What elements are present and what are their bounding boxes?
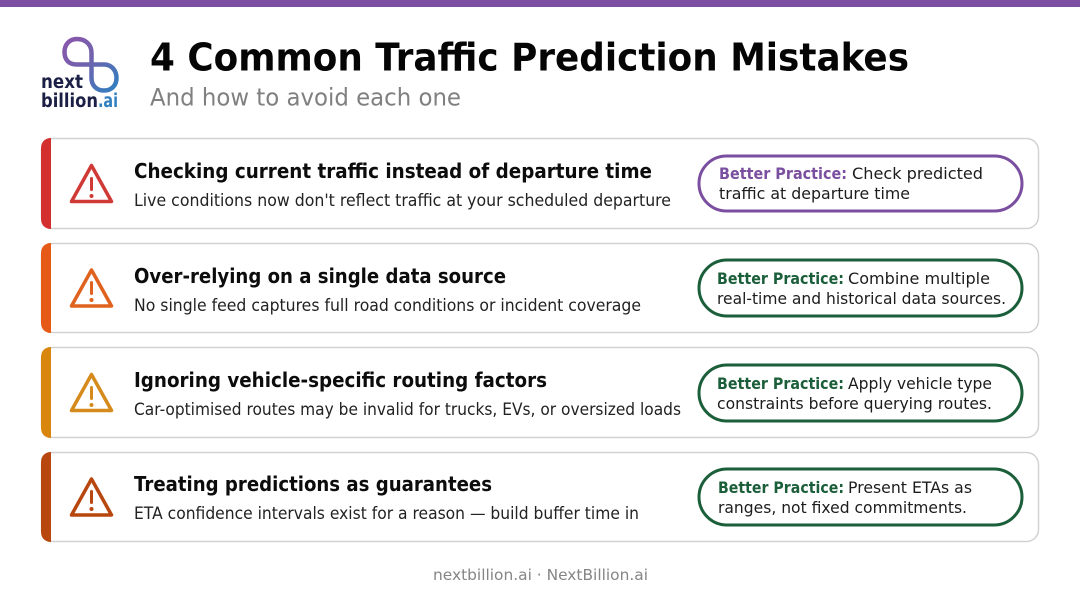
better practice pill: Apply vehicle type	[848, 374, 992, 393]
better practice pill	[699, 260, 1022, 316]
better practice pill: Better Practice:	[718, 478, 844, 497]
rust accent bar	[41, 452, 51, 542]
better practice pill: traffic at departure time	[719, 184, 910, 203]
mistake heading: Over-relying on a single data source	[134, 264, 506, 288]
better practice pill: Better Practice:	[719, 164, 847, 183]
panel: mistake 2	[41, 243, 1038, 333]
better practice pill: Better Practice:	[717, 269, 844, 288]
title: 4 Common Traffic Prediction Mistakes	[150, 36, 909, 80]
better practice pill	[699, 156, 1022, 211]
mistake description: Live conditions now don't reflect traffic at your scheduled departure	[134, 191, 671, 210]
orange accent bar	[41, 243, 51, 333]
amber accent bar	[41, 347, 51, 438]
red accent bar	[41, 138, 51, 229]
better practice pill: real-time and historical data sources.	[717, 289, 1006, 308]
better practice pill: Better Practice:	[717, 374, 844, 393]
panel: mistake 1	[41, 138, 1038, 229]
panel: mistake 4	[41, 452, 1038, 542]
logo: nextbillion.ai: .ai	[98, 91, 118, 112]
top accent bar	[0, 0, 1080, 7]
mistake heading: Checking current traffic instead of departure time	[134, 159, 652, 183]
better practice pill: constraints before querying routes.	[717, 394, 992, 413]
icon: warning triangle	[72, 374, 112, 410]
logo: nextbillion.ai: next	[41, 72, 83, 93]
better practice pill: Check predicted	[852, 164, 983, 183]
mistake heading: Ignoring vehicle-specific routing factors	[134, 368, 547, 392]
logo: nextbillion.ai: billion	[41, 91, 98, 112]
icon: warning triangle	[72, 166, 112, 202]
footer: nextbillion.ai · NextBillion.ai	[433, 566, 648, 584]
better practice pill	[699, 469, 1022, 525]
better practice pill: Combine multiple	[848, 269, 990, 288]
better practice pill	[699, 365, 1022, 421]
subtitle: And how to avoid each one	[150, 84, 461, 112]
mistake heading: Treating predictions as guarantees	[134, 472, 492, 496]
better practice pill: Present ETAs as	[848, 478, 972, 497]
panel: mistake 3	[41, 347, 1038, 438]
mistake description: Car-optimised routes may be invalid for trucks, EVs, or oversized loads	[134, 400, 681, 419]
icon: warning triangle	[72, 479, 112, 515]
mistake description: No single feed captures full road conditions or incident coverage	[134, 296, 641, 315]
better practice pill: ranges, not fixed commitments.	[718, 498, 967, 517]
logo: nextbillion.ai	[41, 39, 118, 112]
mistake description: ETA confidence intervals exist for a reason — build buffer time in	[134, 504, 639, 523]
icon: warning triangle	[72, 270, 112, 306]
